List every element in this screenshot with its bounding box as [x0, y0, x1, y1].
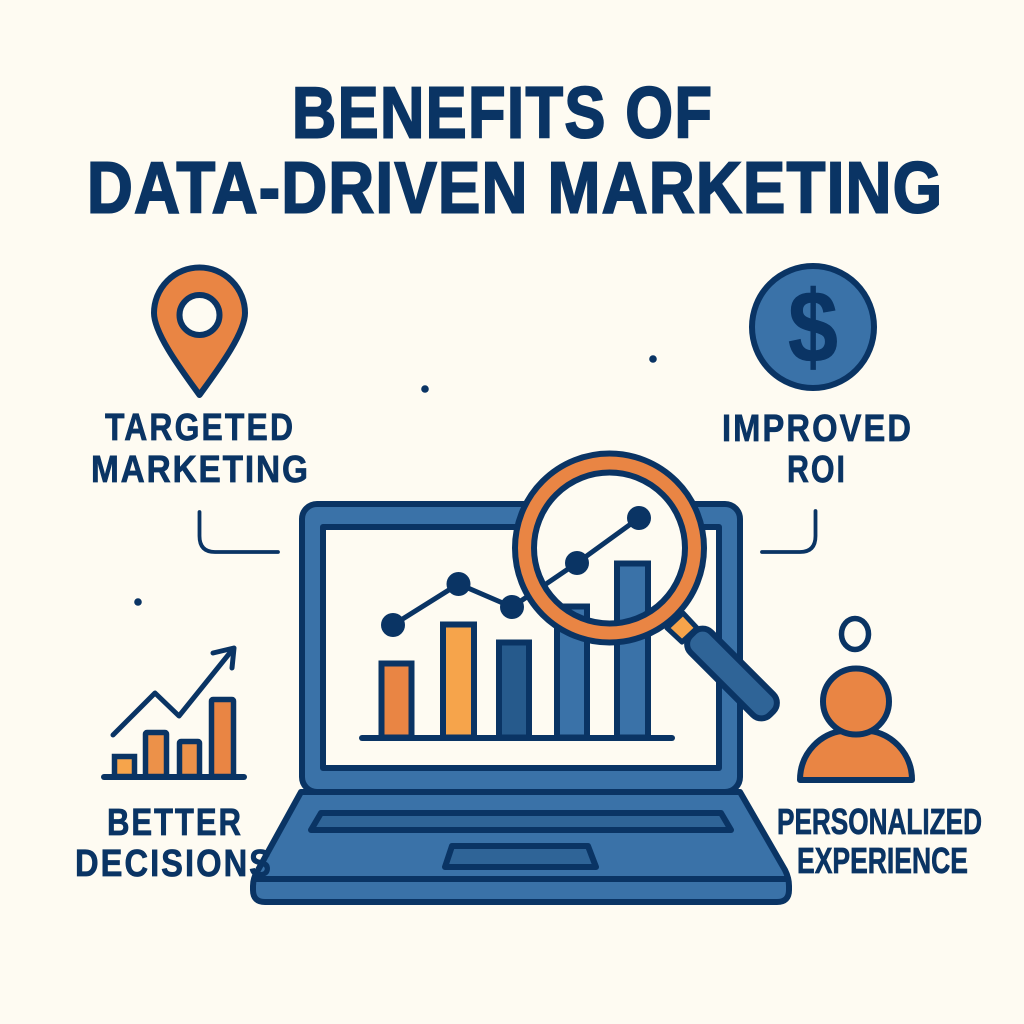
title: DATA-DRIVEN MARKETING	[87, 149, 942, 228]
connector: right bracket	[762, 511, 816, 552]
magnified chart	[545, 506, 651, 620]
title: BENEFITS OF	[292, 74, 712, 154]
decorative dot	[649, 355, 657, 363]
label: targeted marketing	[91, 406, 308, 490]
icon: growth chart	[104, 648, 244, 777]
label: targeted marketing: TARGETED	[105, 406, 293, 449]
bar 3	[499, 642, 529, 738]
label: improved roi: IMPROVED	[722, 407, 911, 450]
bar 5	[617, 564, 648, 738]
label: personalized experience	[777, 801, 982, 881]
keyboard	[311, 813, 731, 830]
icon: person	[800, 618, 912, 780]
axis	[362, 735, 672, 741]
label: improved roi: ROI	[787, 449, 845, 491]
bar 2	[443, 624, 474, 738]
connector: left bracket	[200, 512, 278, 552]
lens	[536, 474, 684, 622]
laptop	[253, 504, 789, 902]
laptop lid	[302, 504, 740, 792]
label: targeted marketing: MARKETING	[91, 448, 308, 490]
decorative dot	[421, 385, 429, 393]
handle collar	[667, 613, 697, 642]
base divider	[253, 876, 789, 882]
label: improved roi	[722, 407, 911, 491]
label: personalized experience: EXPERIENCE	[797, 840, 968, 881]
trackpad	[445, 846, 596, 867]
label: better decisions: BETTER	[107, 802, 241, 844]
icon: dollar coin	[752, 266, 874, 388]
laptop screen	[323, 527, 719, 768]
icon: location pin	[154, 268, 245, 395]
decorative dot	[134, 598, 142, 606]
lens ring	[524, 463, 694, 633]
bar 4	[557, 606, 587, 738]
laptop base	[253, 792, 789, 902]
label: better decisions	[75, 802, 271, 885]
handle	[682, 624, 782, 723]
bar chart	[362, 518, 672, 738]
trend line	[393, 518, 639, 625]
icon: dollar coin: $	[788, 271, 838, 384]
bar 1	[382, 664, 412, 738]
magnifying glass	[512, 463, 782, 738]
title	[87, 74, 942, 228]
label: better decisions: DECISIONS	[75, 842, 271, 885]
